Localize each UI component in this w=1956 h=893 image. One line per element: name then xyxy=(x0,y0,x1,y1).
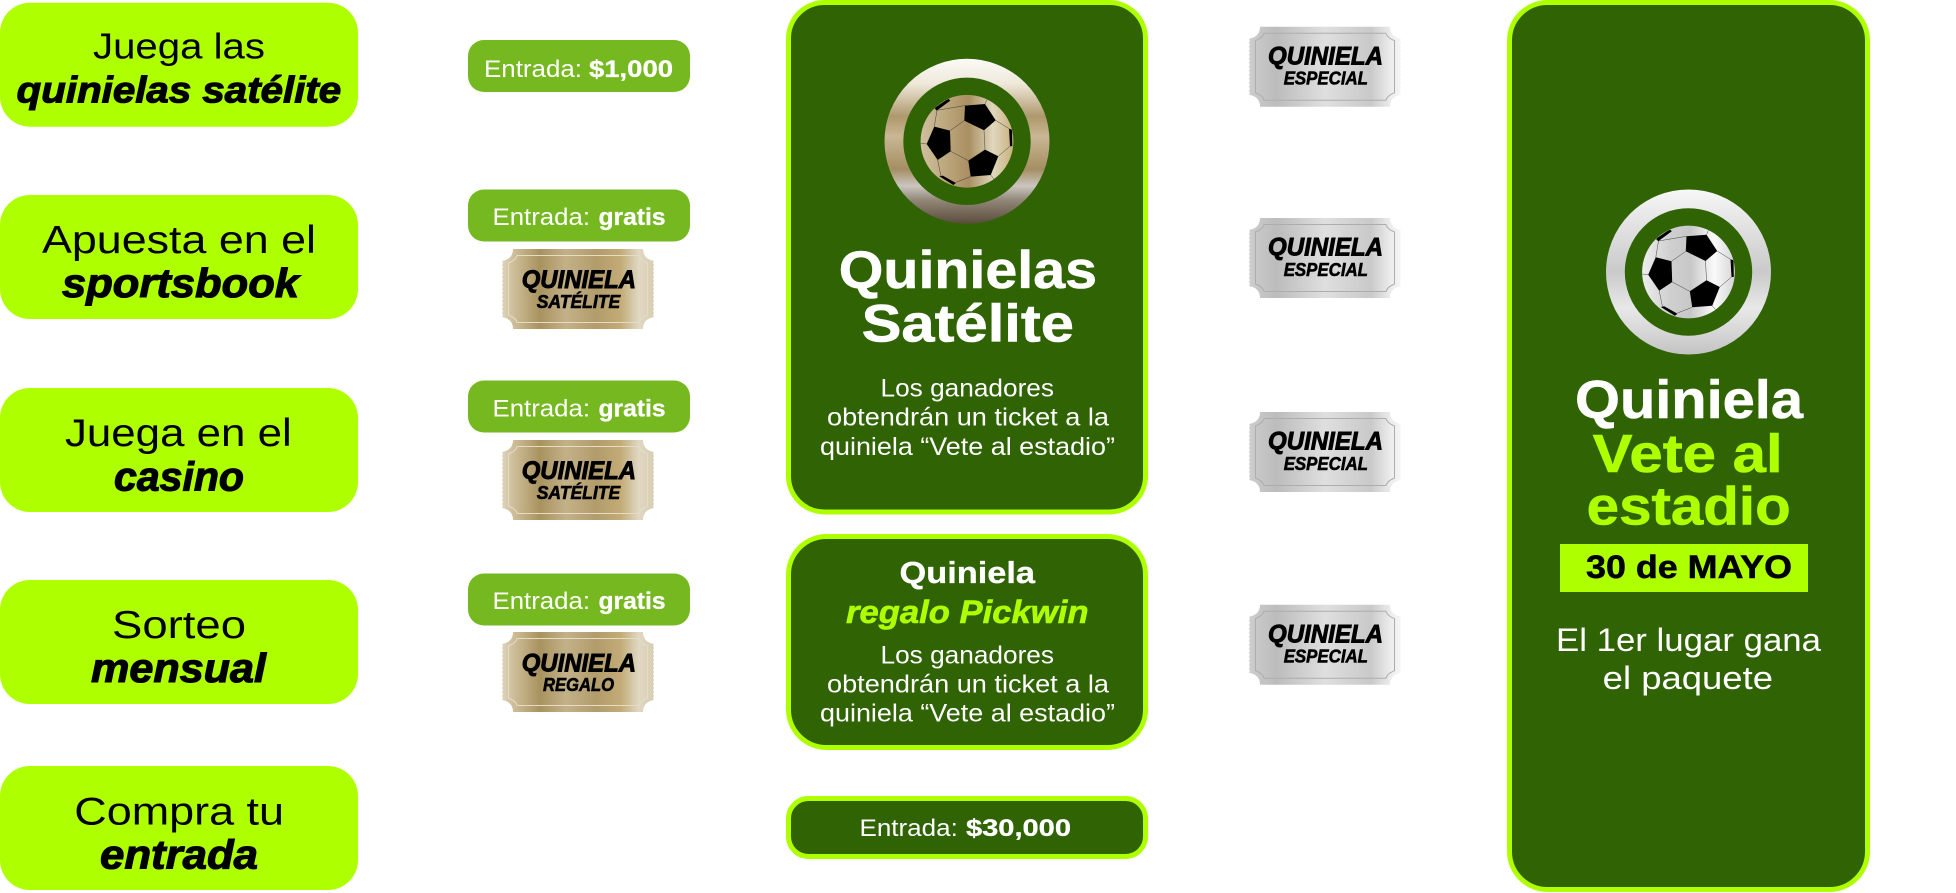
silver ticket: quiniela especial 4 xyxy=(1249,605,1401,685)
panel: quiniela regalo Pickwin xyxy=(788,536,1146,748)
panel: entrada $30,000: Entrada: xyxy=(860,815,958,842)
icon: gold soccer ball in ring xyxy=(894,68,1040,214)
gold ticket: quiniela regalo xyxy=(502,632,654,712)
description text: quiniela “Vete al estadio” xyxy=(820,433,1115,461)
heading: quiniela vete al estadio xyxy=(1575,370,1804,537)
gold ticket: quiniela satélite: QUINIELA xyxy=(522,457,636,485)
entry badge: $1,000 xyxy=(468,40,690,92)
date banner: 30 de mayo: 30 de MAYO xyxy=(1586,549,1792,585)
gold ticket: quiniela satélite xyxy=(502,249,654,329)
silver ticket: quiniela especial 4: ESPECIAL xyxy=(1284,647,1368,667)
panel: quiniela regalo Pickwin: Los ganadores xyxy=(880,641,1054,669)
entry badge: gratis (sportsbook): Entrada: xyxy=(492,204,590,231)
step pill: casino xyxy=(0,388,358,512)
panel: quiniela vete al estadio xyxy=(1510,2,1868,890)
heading: quinielas satélite: Satélite xyxy=(862,295,1074,354)
heading: quinielas satélite: Quinielas xyxy=(839,241,1097,300)
step pill: quinielas satélite: quinielas satélite xyxy=(17,70,341,111)
panel: entrada $30,000 xyxy=(788,798,1146,856)
prize text xyxy=(1556,622,1821,696)
step pill: casino: casino xyxy=(114,454,244,500)
description text: Los ganadores xyxy=(880,375,1054,403)
silver ticket: quiniela especial 2 xyxy=(1249,218,1401,298)
step pill: sorteo mensual xyxy=(0,580,358,704)
step pill: compra tu entrada xyxy=(0,766,358,890)
entry badge: gratis (casino) xyxy=(468,380,690,432)
gold ticket: quiniela regalo: REGALO xyxy=(543,675,614,695)
entry badge: gratis (sportsbook) xyxy=(468,190,690,242)
step pill: casino: Juega en el xyxy=(65,412,292,455)
heading: quiniela vete al estadio: estadio xyxy=(1587,477,1791,537)
silver ticket: quiniela especial 3: ESPECIAL xyxy=(1284,454,1368,474)
panel: quinielas satélite xyxy=(788,2,1146,512)
heading: quiniela vete al estadio: Quiniela xyxy=(1575,370,1804,430)
silver ticket: quiniela especial 2: ESPECIAL xyxy=(1284,260,1368,280)
entry badge: gratis (sorteo) xyxy=(468,574,690,626)
entry badge: gratis (casino): Entrada: xyxy=(492,396,590,422)
description text: obtendrán un ticket a la xyxy=(827,404,1109,432)
panel: quiniela regalo Pickwin: obtendrán un ticket a la xyxy=(827,670,1109,698)
silver ticket: quiniela especial 1: QUINIELA xyxy=(1268,42,1383,70)
prize text: El 1er lugar gana xyxy=(1556,622,1821,658)
silver ticket: quiniela especial 2: QUINIELA xyxy=(1268,234,1383,262)
gold ticket: quiniela satélite: QUINIELA xyxy=(522,266,636,294)
step pill: sorteo mensual: mensual xyxy=(91,645,268,691)
panel: quiniela regalo Pickwin: regalo Pickwin xyxy=(846,594,1088,630)
silver ticket: quiniela especial 3: QUINIELA xyxy=(1268,428,1383,456)
entry badge: $1,000: Entrada: xyxy=(484,56,582,83)
entry badge: gratis (sorteo): gratis xyxy=(598,588,666,615)
entry badge: gratis (sorteo): Entrada: xyxy=(492,588,590,615)
silver ticket: quiniela especial 3 xyxy=(1249,412,1401,492)
entry badge: gratis (sportsbook): gratis xyxy=(598,204,666,231)
gold ticket: quiniela satélite xyxy=(502,440,654,520)
step pill: compra tu entrada: entrada xyxy=(100,831,258,877)
heading: quiniela vete al estadio: Vete al xyxy=(1593,424,1783,484)
gold ticket: quiniela regalo: QUINIELA xyxy=(522,650,636,678)
prize text: el paquete xyxy=(1603,660,1773,696)
entry badge: gratis (casino): gratis xyxy=(598,396,666,422)
step pill: sportsbook: Apuesta en el xyxy=(42,219,316,262)
step pill: quinielas satélite: Juega las xyxy=(93,25,265,66)
panel: entrada $30,000: $30,000 xyxy=(966,815,1071,842)
panel: quiniela regalo Pickwin: quiniela “Vete al estadio” xyxy=(820,700,1115,728)
step pill: compra tu entrada: Compra tu xyxy=(74,790,284,833)
silver ticket: quiniela especial 1: ESPECIAL xyxy=(1284,69,1368,89)
description text xyxy=(820,375,1115,461)
silver ticket: quiniela especial 4: QUINIELA xyxy=(1268,620,1383,648)
heading: quinielas satélite xyxy=(839,241,1097,354)
icon: silver soccer ball in ring xyxy=(1615,199,1762,345)
panel: quiniela regalo Pickwin: Quiniela xyxy=(900,555,1036,590)
step pill: sportsbook: sportsbook xyxy=(62,260,301,306)
date banner: 30 de mayo xyxy=(1560,544,1808,592)
gold ticket: quiniela satélite: SATÉLITE xyxy=(537,482,621,503)
step pill: sportsbook xyxy=(0,195,358,319)
step pill: sorteo mensual: Sorteo xyxy=(112,604,246,647)
step pill: quinielas satélite xyxy=(0,3,358,127)
silver ticket: quiniela especial 1 xyxy=(1249,27,1401,107)
entry badge: $1,000: $1,000 xyxy=(589,56,673,83)
gold ticket: quiniela satélite: SATÉLITE xyxy=(537,291,621,312)
